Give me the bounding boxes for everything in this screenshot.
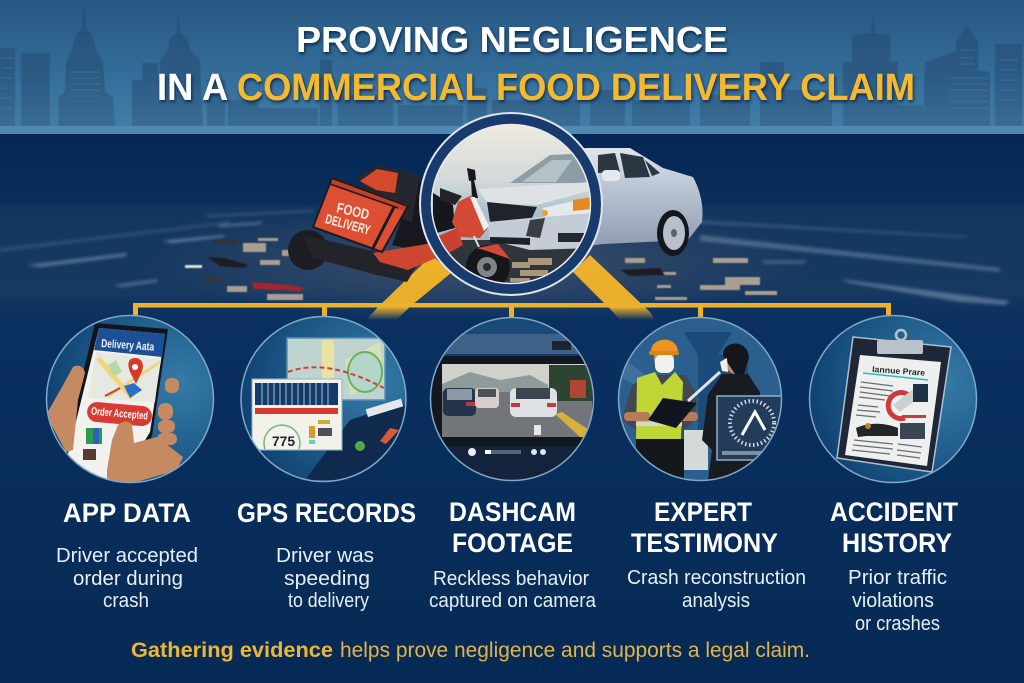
delivery bag	[313, 177, 408, 252]
header band with sky	[0, 0, 1024, 134]
scooter dark seat	[392, 178, 452, 250]
column text: accident history: ACCIDENT	[830, 497, 958, 527]
column text: gps records: to delivery	[288, 590, 369, 612]
column text: expert testimony: EXPERT	[654, 497, 752, 527]
column text: app data: Driver accepted	[56, 545, 198, 567]
data card	[252, 379, 342, 450]
hands	[46, 366, 183, 484]
column text: app data	[56, 498, 198, 612]
circle 4: expert testimony	[618, 317, 783, 481]
hood	[478, 182, 592, 205]
column text: app data: order during	[73, 568, 183, 590]
headlight	[543, 201, 590, 217]
column text: dashcam footage: captured on camera	[429, 590, 597, 612]
column text: accident history: Prior traffic	[848, 567, 947, 589]
column text: gps records: Driver was	[276, 545, 374, 567]
horizon glow strip	[0, 126, 1024, 134]
background: road surface	[0, 204, 1024, 330]
delivery bag: FOOD	[335, 200, 371, 223]
worker	[622, 340, 720, 481]
crumpled engine	[487, 202, 537, 222]
column text: gps records: speeding	[284, 568, 370, 590]
column text: dashcam footage: Reckless behavior	[433, 568, 589, 590]
column text: gps records: GPS RECORDS	[237, 498, 416, 528]
column text: accident history: or crashes	[855, 613, 940, 635]
column text: expert testimony: analysis	[682, 590, 750, 612]
order accepted button	[86, 401, 153, 427]
road markings	[0, 210, 1010, 305]
phone: Delivery Aata	[101, 338, 155, 354]
circle 3: dashcam footage	[430, 317, 595, 486]
column text: app data: APP DATA	[63, 498, 191, 528]
title	[157, 19, 915, 109]
player controls	[468, 448, 476, 456]
circle 5: accident history	[809, 315, 977, 483]
circle 2: gps records	[240, 316, 412, 482]
scooter rear and delivery box	[288, 165, 452, 282]
map pin	[128, 358, 143, 384]
circle 5: accident history: Iannue Prare	[872, 364, 926, 378]
column text: accident history: violations	[852, 590, 934, 612]
lens scene	[432, 125, 590, 283]
yellow connector tree	[133, 303, 891, 319]
column text: dashcam footage	[429, 497, 597, 612]
circle 1: app data	[46, 315, 214, 490]
column text: expert testimony: Crash reconstruction	[627, 567, 806, 589]
column text: accident history: HISTORY	[842, 528, 952, 558]
column text: expert testimony	[627, 497, 806, 612]
scooter red side panel	[373, 243, 436, 270]
gauge panel	[717, 396, 783, 460]
dark car	[443, 388, 476, 416]
dash console	[305, 402, 412, 480]
column text: expert testimony: TESTIMONY	[631, 528, 778, 558]
magnifying glass	[410, 112, 603, 296]
white car near	[510, 388, 557, 417]
footer statement	[131, 638, 810, 662]
title: IN A COMMERCIAL FOOD DELIVERY CLAIM	[157, 67, 915, 109]
data card: 775	[272, 433, 295, 449]
clipboard	[837, 337, 951, 472]
footer statement: helps prove negligence and supports a legal claim.	[340, 638, 810, 662]
column text: dashcam footage: DASHCAM	[449, 497, 576, 527]
title: PROVING NEGLIGENCE	[296, 19, 728, 60]
road debris	[510, 258, 552, 282]
scooter rear wheel	[288, 230, 328, 270]
city skyline	[0, 0, 1022, 128]
footer statement: Gathering evidence	[131, 638, 333, 662]
white car far	[475, 388, 499, 408]
map panel	[287, 338, 385, 400]
column text: app data: crash	[103, 590, 149, 612]
delivery bag: DELIVERY	[324, 211, 372, 238]
column text: dashcam footage: FOOTAGE	[452, 528, 573, 558]
phone: Order Accepted	[91, 406, 148, 423]
top box	[357, 165, 420, 222]
crash debris	[185, 238, 777, 300]
scooter dark body	[303, 235, 420, 282]
attorney	[702, 344, 760, 480]
phone	[60, 323, 168, 490]
scooter front	[433, 193, 455, 234]
column text: gps records	[237, 498, 416, 612]
bumper	[488, 212, 592, 250]
windshield	[510, 153, 592, 183]
metal clip	[877, 340, 923, 354]
road scene	[442, 364, 592, 437]
yellow connector beams from magnifier	[366, 255, 655, 320]
report paper	[845, 355, 941, 466]
skyline windows	[2, 50, 1018, 108]
column text: accident history	[830, 497, 958, 635]
silver sedan	[560, 148, 703, 256]
